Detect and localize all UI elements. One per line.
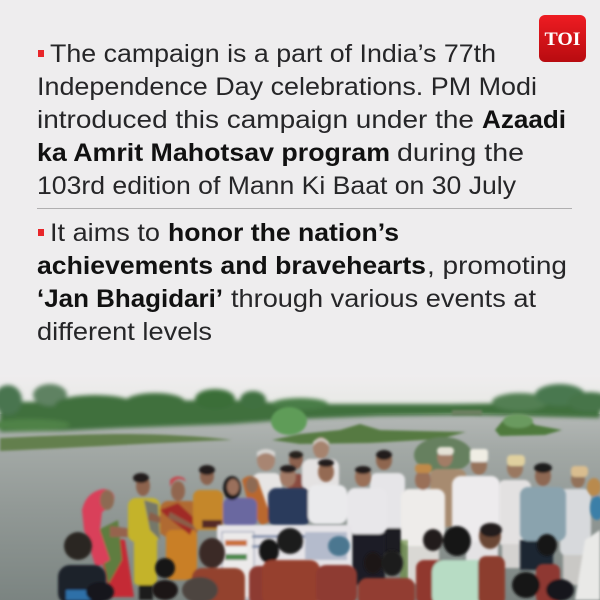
text block: campaign aims — [37, 219, 567, 346]
banner — [217, 525, 352, 600]
text block: campaign background: ka Amrit Mahotsav program — [37, 139, 390, 167]
woman in red scarf — [98, 535, 134, 597]
old man white shirt left — [252, 473, 282, 513]
seated heads — [155, 558, 175, 578]
children in front row — [58, 523, 574, 600]
man with orange turban — [407, 544, 439, 584]
man in navy shirt — [268, 488, 310, 526]
icon: TOI logo: TOI — [544, 29, 580, 50]
man white shirt dark trousers — [352, 530, 385, 585]
photo: villagers holding soil by a lake — [0, 375, 600, 600]
woman in yellow — [128, 498, 160, 542]
text block: campaign background: 103rd edition of Mann Ki Baat on 30 July — [37, 172, 517, 200]
text block: campaign background: during the — [397, 139, 524, 167]
man in white shirt — [308, 485, 347, 524]
text block: campaign aims: different levels — [37, 318, 212, 346]
woman orange dupatta — [193, 490, 223, 530]
text block: campaign background: Independence Day celebrations. PM Modi — [37, 73, 537, 101]
bullet — [38, 50, 44, 57]
woman in purple — [223, 498, 257, 527]
islands — [0, 407, 562, 473]
text block: campaign aims: achievements and bravehearts — [37, 252, 426, 280]
woman in orange sari — [160, 501, 198, 537]
boy in dark t-shirt — [58, 565, 106, 600]
woman orange scarf — [242, 476, 272, 526]
man turban — [498, 480, 531, 546]
text block: campaign aims: It aims to — [50, 219, 160, 247]
text block: campaign background: The campaign is a part of India’s 77th — [50, 40, 496, 68]
text block: campaign background: Azaadi — [482, 106, 566, 134]
text block: campaign aims: ‘Jan Bhagidari’ — [37, 285, 223, 313]
man cream turban far right — [560, 489, 591, 556]
background — [0, 0, 600, 385]
man with white cap — [466, 540, 498, 564]
water — [0, 414, 600, 600]
grass patches — [400, 540, 408, 600]
text block: campaign aims: through various events at — [231, 285, 536, 313]
group of adults, back row — [252, 437, 591, 585]
man behind white — [370, 473, 405, 531]
old man white — [302, 459, 339, 491]
person at right edge — [575, 530, 600, 600]
boy in mint shirt — [432, 560, 490, 600]
man in blue shirt — [520, 540, 553, 570]
text block: campaign background — [37, 40, 566, 200]
bullet — [38, 229, 44, 236]
icon: TOI logo — [539, 15, 586, 62]
sky — [0, 375, 600, 425]
text block: campaign aims: honor the nation’s — [168, 219, 399, 247]
group of adults, front row — [82, 449, 600, 600]
maroon shirts — [192, 568, 245, 600]
text block: campaign background: introduced this campaign under the — [37, 106, 474, 134]
distant tree line — [0, 384, 600, 432]
man dark hair — [288, 474, 306, 492]
man beige shirt — [430, 469, 466, 527]
text block: campaign aims: , promoting — [427, 252, 567, 280]
